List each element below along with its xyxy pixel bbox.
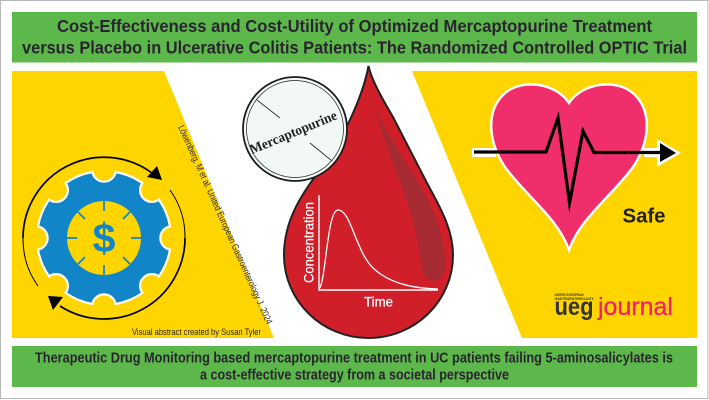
logo: ueg journal: GASTROENTEROLOGY (554, 297, 594, 301)
line chart: concentration over time: Concentration (300, 202, 316, 283)
blood drop with concentration-time chart (284, 66, 453, 338)
citation text: Löwenberg, M et al. United European Gastroenterology J. 2024 (175, 124, 274, 326)
logo: ueg journal: UNITED EUROPEAN (554, 293, 584, 297)
icon: gear with dollar sign and cycle arrows: $ (93, 215, 116, 261)
conclusion banner: a cost-effective strategy from a societal perspective (200, 366, 509, 384)
title banner: Cost-Effectiveness and Cost-Utility of Optimized Mercaptopurine Treatment (57, 16, 652, 36)
drop highlight (375, 108, 445, 281)
panel: right yellow safety panel (412, 71, 697, 338)
label: safe: Safe (622, 206, 666, 228)
conclusion banner (12, 346, 697, 387)
logo: ueg journal: journal (597, 293, 673, 321)
icon: mercaptopurine pill (243, 77, 347, 181)
logo: ueg journal (554, 293, 673, 321)
line chart: concentration over time (300, 195, 438, 310)
credit text: Visual abstract created by Susan Tyler (132, 327, 261, 338)
icon: heart with ECG arrow (472, 84, 681, 250)
logo: ueg journal: ueg (554, 293, 594, 321)
panel: left yellow cost panel (12, 71, 274, 338)
line chart: concentration over time: Time (364, 294, 393, 310)
icon: gear with dollar sign and cycle arrows (23, 157, 185, 319)
icon: mercaptopurine pill: Mercaptopurine (248, 109, 339, 158)
title banner (12, 12, 697, 62)
